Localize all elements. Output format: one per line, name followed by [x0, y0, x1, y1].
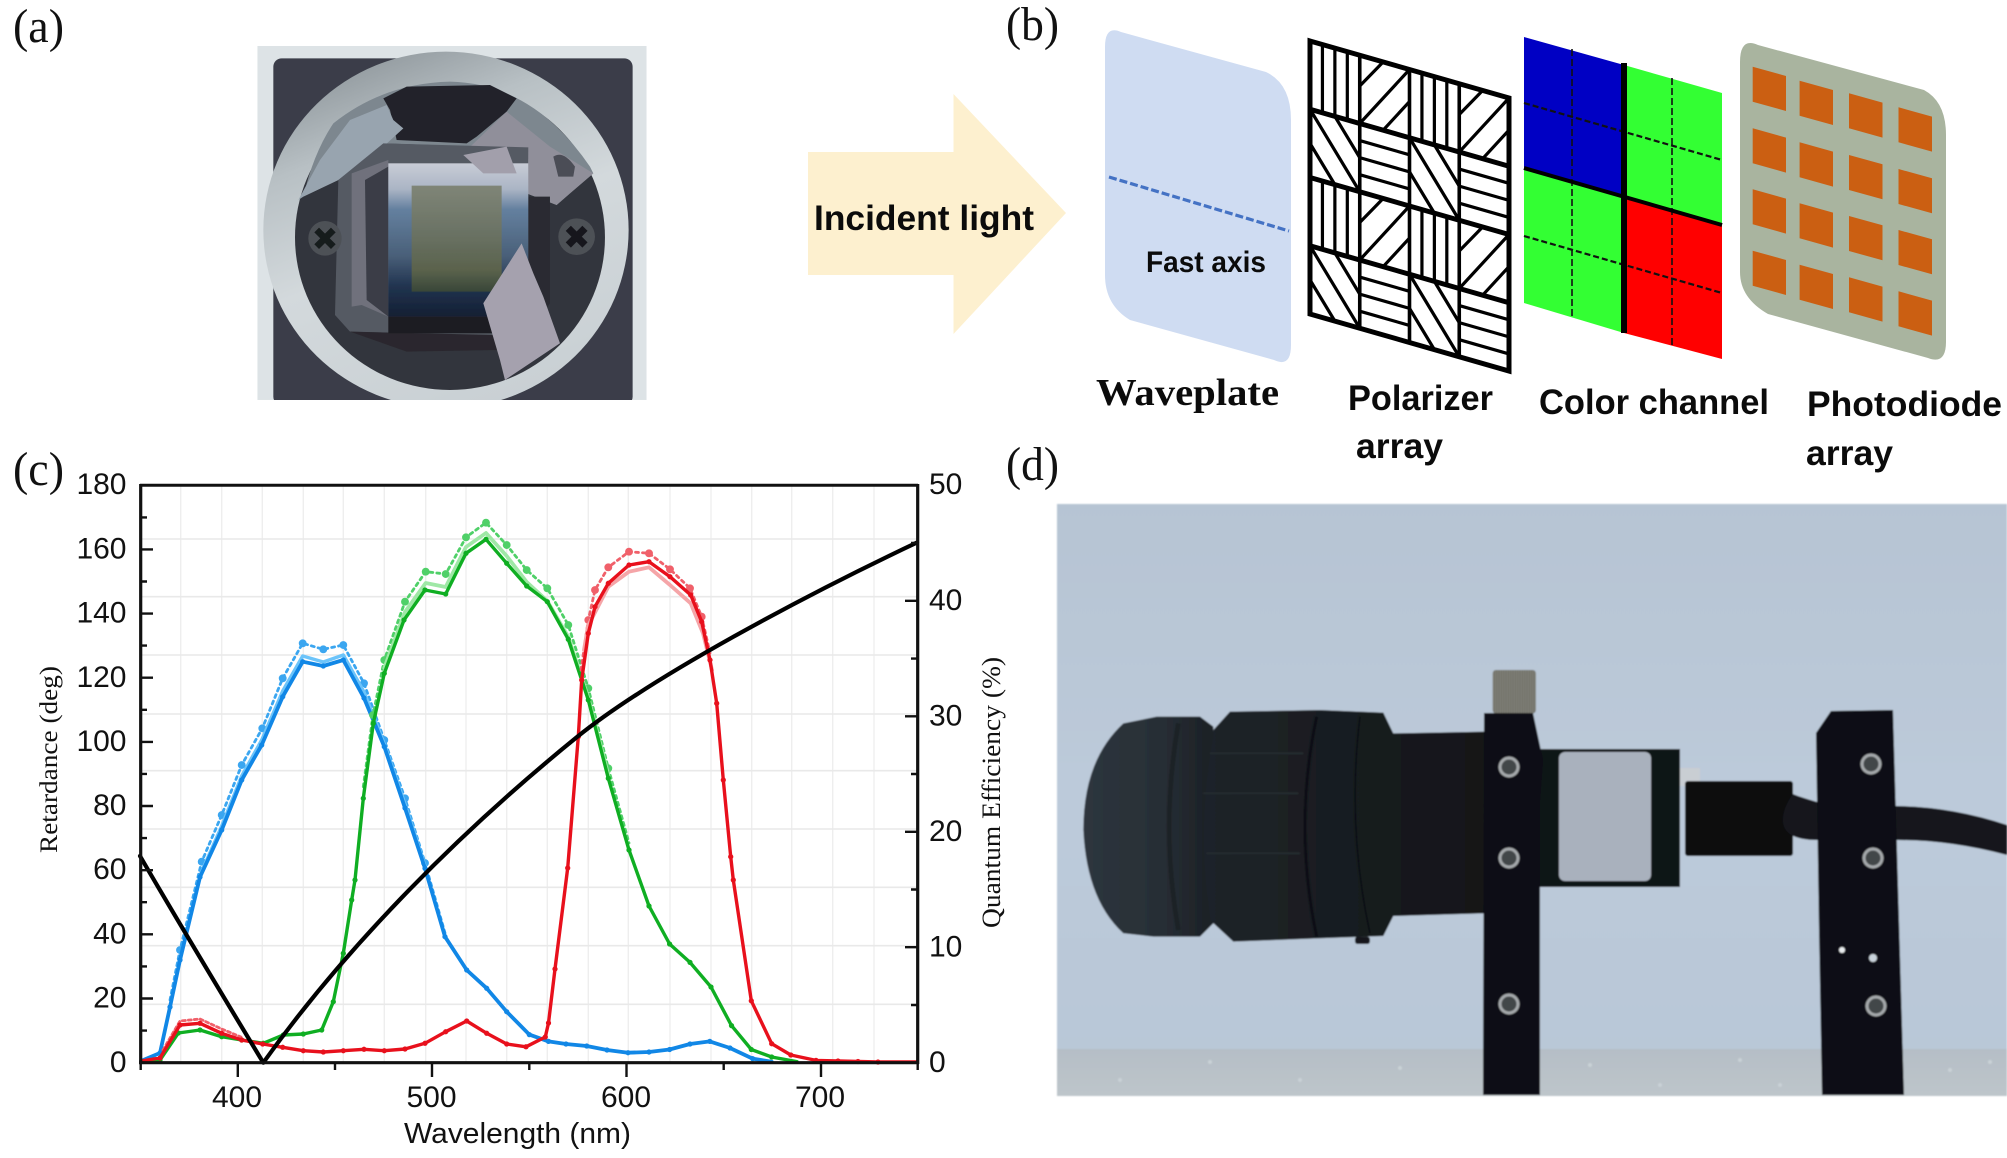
axis frame and ticks — [139, 484, 919, 1077]
right axis tick labels: 20 — [929, 815, 962, 848]
x axis tick labels: 700 — [795, 1081, 845, 1114]
panel label (c): (c) — [13, 443, 64, 496]
left axis tick labels: 40 — [93, 918, 126, 950]
left axis tick labels — [76, 468, 126, 1079]
black retardance curve — [140, 542, 917, 1063]
blue channel curves — [141, 643, 772, 1062]
grid lines — [141, 486, 917, 1062]
left axis tick labels: 0 — [110, 1046, 126, 1079]
panel d: photo of camera setup — [1057, 504, 2007, 1096]
right axis tick labels: 40 — [929, 584, 962, 617]
x axis tick labels: 500 — [406, 1081, 457, 1114]
fast axis label: Fast axis — [1146, 246, 1266, 279]
x axis tick labels — [212, 1081, 845, 1114]
left axis tick labels: 60 — [93, 853, 126, 886]
polarizer array label: array — [1356, 427, 1444, 466]
left axis tick labels: 100 — [76, 725, 126, 758]
photodiode array label: Photodiode — [1807, 385, 2002, 424]
photodiode array label: array — [1806, 434, 1894, 473]
x axis tick labels: 400 — [212, 1081, 262, 1114]
panel label (a): (a) — [13, 0, 64, 53]
panel b: color channel filter — [1524, 37, 1722, 359]
waveplate label: Waveplate — [1096, 372, 1279, 414]
right axis tick labels: 50 — [929, 468, 962, 501]
left axis tick labels: 180 — [76, 468, 126, 501]
panel b: polarizer array grid — [1310, 41, 1509, 371]
x axis tick labels: 600 — [601, 1081, 651, 1114]
x axis title: Wavelength (nm) — [404, 1118, 631, 1150]
panel c: retardance and quantum efficiency chart — [36, 468, 1006, 1150]
right axis tick labels — [929, 468, 962, 1079]
left axis tick labels: 140 — [76, 596, 126, 630]
color channel label: Color channel — [1539, 383, 1769, 422]
left axis tick labels: 160 — [76, 532, 126, 566]
panel a: photo of camera sensor with waveplate — [257, 46, 647, 408]
right axis tick labels: 0 — [929, 1046, 946, 1079]
right axis tick labels: 10 — [929, 930, 962, 964]
panel b: photodiode array — [1740, 43, 1946, 360]
left axis title: Retardance (deg) — [36, 666, 63, 853]
fast axis dashed line — [1109, 177, 1289, 231]
right axis title: Quantum Efficiency (%) — [977, 657, 1006, 928]
panel label (d): (d) — [1006, 438, 1059, 491]
green channel curves — [141, 523, 797, 1062]
left axis tick labels: 120 — [76, 661, 126, 694]
left axis tick labels: 20 — [93, 982, 126, 1014]
left axis tick labels: 80 — [93, 789, 126, 822]
arrow: incident light — [808, 94, 1066, 334]
red channel curves — [141, 552, 917, 1062]
panel b: waveplate layer — [1105, 30, 1291, 362]
right axis tick labels: 30 — [929, 700, 962, 732]
arrow label: Incident light — [814, 199, 1034, 238]
polarizer array label: Polarizer — [1348, 379, 1493, 418]
